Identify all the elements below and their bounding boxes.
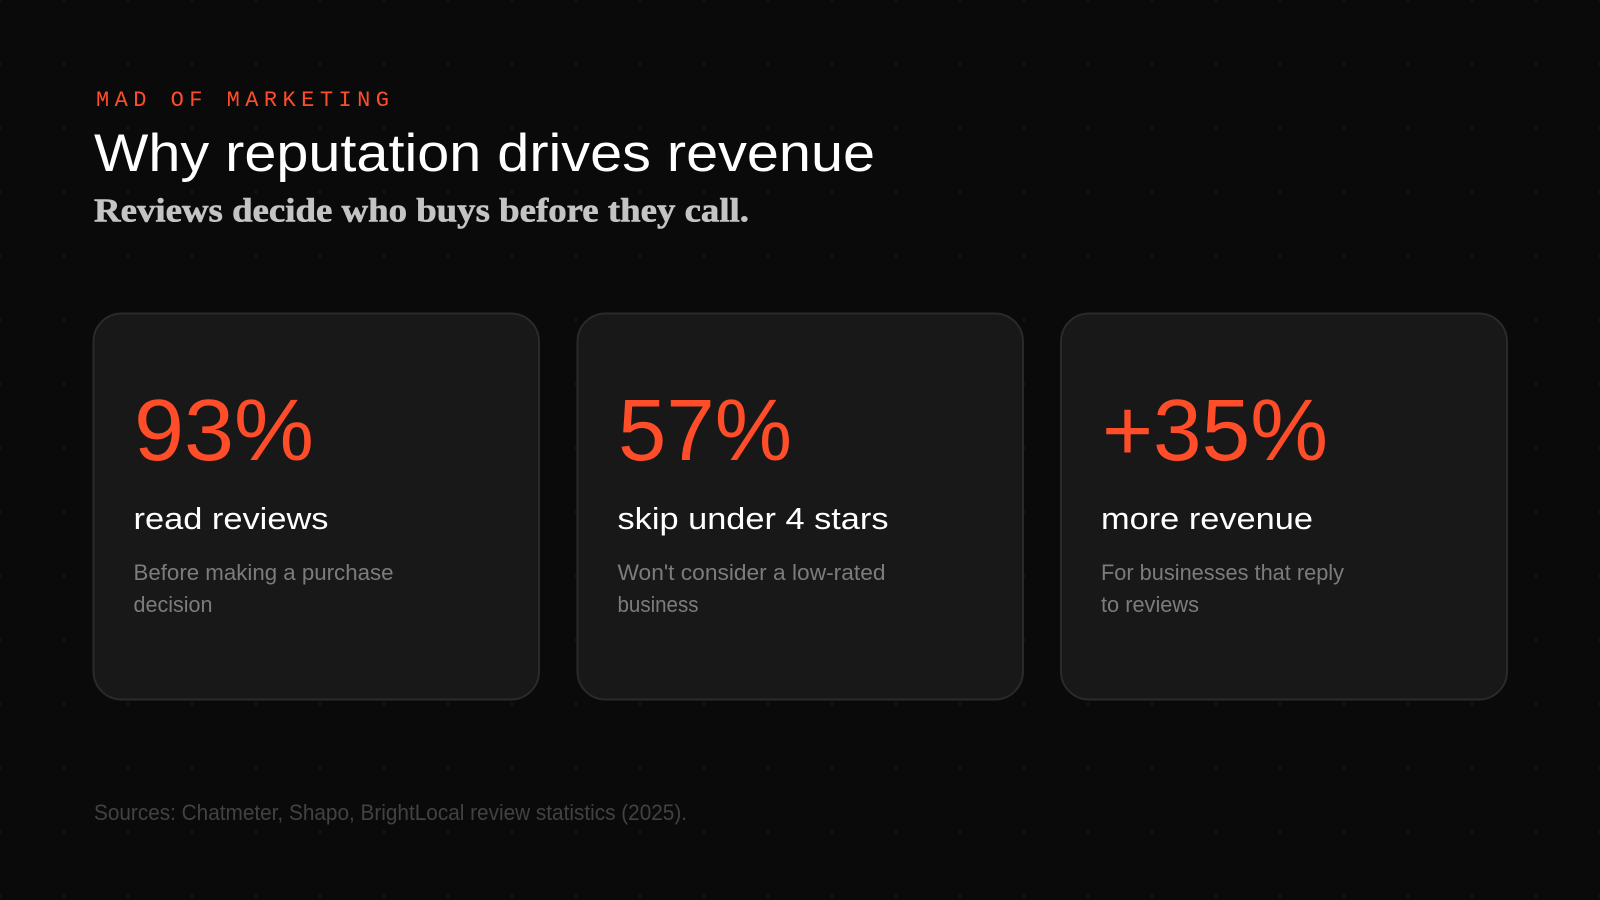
description: For businesses that reply xyxy=(1101,560,1344,585)
panel: 57% skip under 4 stars xyxy=(578,314,1023,700)
sources footnote: Sources: Chatmeter, Shapo, BrightLocal review statistics (2025). xyxy=(94,800,687,825)
title: Why reputation drives revenue xyxy=(94,124,875,183)
description: Before making a purchase xyxy=(134,560,394,585)
panel: 93% read reviews xyxy=(94,314,539,700)
description: Won't consider a low-rated xyxy=(618,560,886,585)
label: skip under 4 stars: skip under 4 stars xyxy=(618,501,888,536)
label: read reviews: read reviews xyxy=(134,501,328,536)
stat: 57%: 57% xyxy=(618,382,792,479)
subtitle: Reviews decide who buys before they call. xyxy=(94,192,749,230)
eyebrow: brand name: MAD OF MARKETING xyxy=(96,88,389,113)
description: decision xyxy=(134,592,212,617)
description: to reviews xyxy=(1101,592,1199,617)
panel: +35% more revenue xyxy=(1061,314,1507,700)
header xyxy=(94,88,875,230)
stat: 93%: 93% xyxy=(134,382,314,479)
label: more revenue: more revenue xyxy=(1101,501,1313,536)
stat: +35%: +35% xyxy=(1102,382,1328,479)
description: business xyxy=(618,592,698,617)
